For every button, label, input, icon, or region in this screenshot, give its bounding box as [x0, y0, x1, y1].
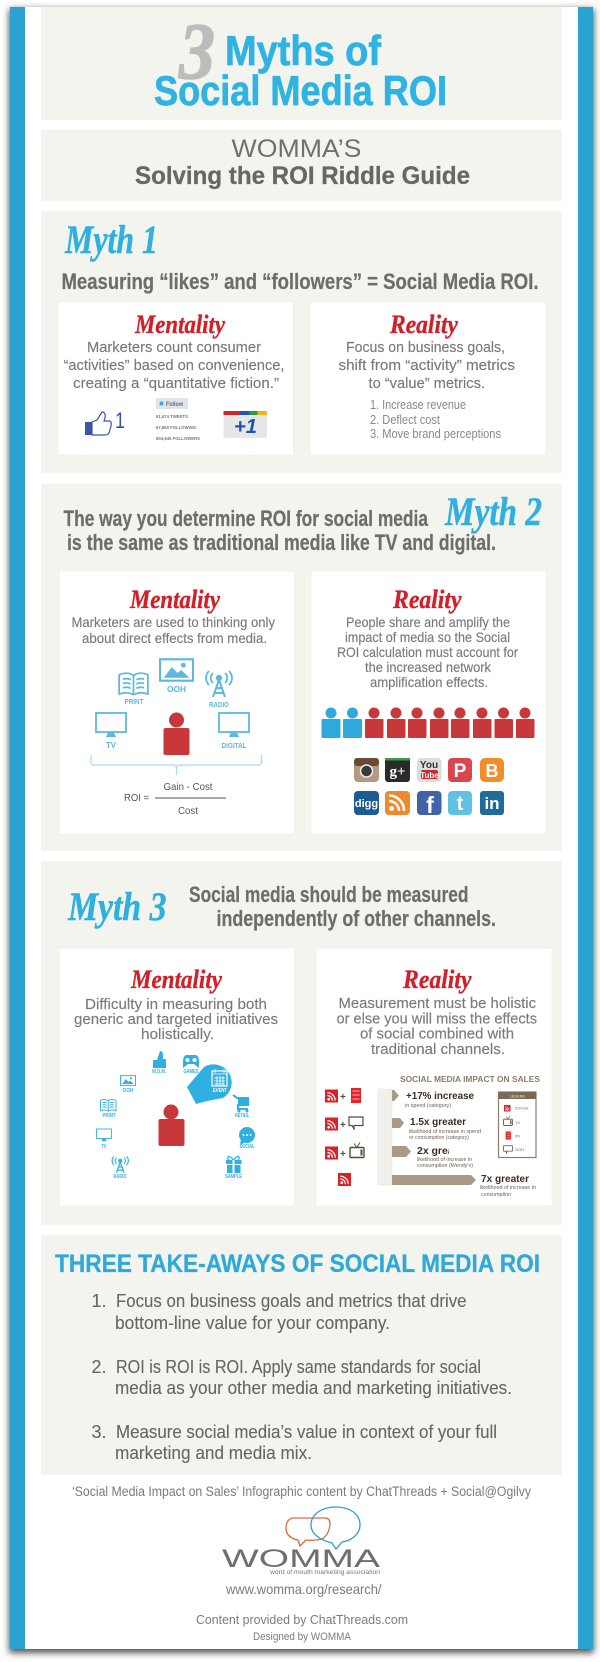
chart: social media impact on sales — [325, 1075, 541, 1198]
mentality text: Difficulty in measuring both — [85, 996, 267, 1013]
myth 2 statement — [64, 506, 496, 555]
icon: ooh — [160, 659, 193, 694]
legend: PR — [515, 1134, 520, 1138]
mentality text: generic and targeted initiatives — [74, 1011, 278, 1028]
icon: tv — [96, 1129, 112, 1150]
reality text: ROI calculation must account for — [337, 644, 518, 660]
icon: social — [239, 1127, 255, 1150]
row 1 text: in spend (category) — [405, 1103, 451, 1109]
icon: word of mouth — [152, 1051, 167, 1075]
icon: tv: TV — [102, 1144, 107, 1150]
reality text: or else you will miss the effects — [336, 1010, 537, 1028]
myth 3 heading: Myth 3 — [67, 884, 166, 929]
card: myth 2 mentality — [59, 571, 294, 834]
social network icons: t — [457, 793, 464, 815]
myth 3 statement: Social media should be measured — [189, 882, 468, 907]
reality text: Measurement must be holistic — [338, 995, 536, 1012]
icon: event callout — [187, 1064, 232, 1104]
myth 2 statement: The way you determine ROI for social media — [64, 506, 428, 531]
reality text: amplification effects. — [370, 674, 488, 690]
take-away 2: 2. — [92, 1357, 107, 1377]
myth 1 heading: Myth 1 — [64, 217, 158, 262]
myth 2 statement: is the same as traditional media like TV and digital. — [67, 530, 496, 555]
take-away 1: Focus on business goals and metrics that drive — [116, 1291, 466, 1311]
icon: print: PRINT — [102, 1113, 116, 1119]
icon: retail — [233, 1095, 249, 1119]
reality heading: Reality — [392, 585, 462, 614]
icon: games — [183, 1055, 199, 1075]
row icons: + — [340, 1092, 346, 1103]
title line 1: Myths of — [225, 27, 382, 74]
mentality heading: Mentality — [134, 310, 225, 339]
arrow bars — [392, 1090, 476, 1185]
social network icons: digg — [355, 798, 378, 810]
card: myth 1 reality — [310, 302, 546, 455]
icon: print — [101, 1099, 116, 1119]
chart title: SOCIAL MEDIA IMPACT ON SALES — [400, 1075, 541, 1084]
icon: ooh — [120, 1076, 136, 1094]
row 2 text: or consumption (category) — [409, 1135, 469, 1141]
icon: facebook like: 1 — [115, 408, 125, 433]
social network icons: f — [426, 792, 434, 818]
social network icons — [354, 758, 504, 818]
icon: radio: RADIO — [209, 702, 229, 709]
reality list: 1. Increase revenue — [370, 398, 466, 412]
row 1 text: +17% increase — [406, 1091, 474, 1102]
reality text: People share and amplify the — [346, 614, 510, 630]
legend: OOH — [515, 1147, 524, 1152]
mentality heading: Mentality — [129, 585, 220, 614]
row 4 text: likelihood of increase in — [480, 1185, 536, 1191]
row icons — [325, 1088, 364, 1186]
reality text: to “value” metrics. — [368, 375, 485, 392]
designer credit: Designed by WOMMA — [253, 1631, 352, 1643]
reality text: Focus on business goals, — [346, 339, 505, 356]
row 3 text: likelihood of increase in — [417, 1157, 472, 1163]
icon: ooh: OOH — [122, 1088, 134, 1094]
mentality heading: Mentality — [130, 965, 222, 994]
icon: radio — [112, 1156, 128, 1180]
twitter follow widget — [156, 398, 200, 441]
ROI formula: Cost — [178, 805, 198, 817]
take-away 1 — [92, 1291, 466, 1333]
numeral 3: 3 — [178, 8, 215, 96]
twitter follow widget: 603,645 FOLLOWERS — [156, 436, 200, 441]
ROI formula — [124, 781, 226, 817]
mentality text — [74, 996, 278, 1043]
reality text: of social combined with — [360, 1026, 514, 1042]
title line 2: Social Media ROI — [154, 67, 447, 114]
left blue border — [10, 7, 25, 1649]
reality text — [337, 614, 518, 690]
mentality text: Marketers count consumer — [87, 339, 261, 356]
mentality text: “activities” based on convenience, — [64, 357, 284, 374]
WOMMA'S: WOMMA’S — [232, 135, 362, 163]
reality list — [370, 398, 501, 441]
guide name: Solving the ROI Riddle Guide — [135, 162, 470, 190]
ROI formula: Gain - Cost — [164, 781, 213, 793]
icon: google plus one: +1 — [234, 416, 257, 438]
icon: radio: RADIO — [114, 1174, 127, 1180]
panel: myth 1 — [41, 211, 562, 473]
social network icons: g+ — [389, 764, 406, 780]
WOMMA wordmark: WOMMA — [222, 1545, 380, 1573]
icon: social: SOCIAL — [240, 1144, 254, 1150]
content credit: Content provided by ChatThreads.com — [196, 1612, 408, 1627]
take-away 3 — [92, 1422, 497, 1463]
legend: TV — [515, 1120, 520, 1125]
reality text: impact of media so the Social — [345, 629, 510, 645]
row 2 text: likelihood of increase in spend — [409, 1129, 481, 1135]
icon: print — [119, 673, 148, 706]
take-away 3: 3. — [92, 1422, 107, 1442]
legend: SOCIAL — [515, 1106, 530, 1110]
ROI formula: ROI = — [124, 792, 149, 804]
mentality text — [72, 614, 275, 646]
right blue border — [578, 7, 593, 1649]
WOMMA logo — [222, 1507, 380, 1576]
row icons: + — [340, 1149, 346, 1160]
row 4 text — [480, 1174, 536, 1198]
take-aways heading: THREE TAKE-AWAYS OF SOCIAL MEDIA ROI — [55, 1250, 540, 1278]
row 3 text — [417, 1145, 473, 1169]
icon: print: PRINT — [124, 699, 144, 706]
row 2 text — [409, 1117, 481, 1141]
panel: title — [41, 7, 562, 120]
take-away 2: media as your other media and marketing initiatives. — [115, 1378, 512, 1398]
icon: ooh: OOH — [167, 685, 186, 694]
network people row — [322, 708, 534, 738]
take-away 2: ROI is ROI is ROI. Apply same standards for social — [116, 1357, 481, 1377]
mentality text — [64, 339, 284, 392]
mentality text: about direct effects from media. — [82, 630, 267, 646]
icon: digital: DIGITAL — [222, 743, 247, 750]
legend — [498, 1092, 536, 1158]
panel: myth 3 — [41, 861, 562, 1225]
mentality text: Marketers are used to thinking only — [72, 614, 275, 630]
myth 3 statement — [189, 882, 496, 931]
bar axis — [378, 1089, 392, 1185]
reality text: the increased network — [365, 659, 492, 675]
icon: tv — [96, 713, 126, 750]
icon: google plus one — [224, 411, 267, 438]
legend: LEGEND — [510, 1094, 525, 1098]
myth 3 statement: independently of other channels. — [216, 906, 496, 931]
row 4 text: consumption — [481, 1192, 511, 1198]
take-away 2 — [92, 1357, 512, 1398]
myth 2 heading: Myth 2 — [444, 489, 542, 534]
row icons: + — [340, 1120, 346, 1131]
take-away 1: bottom-line value for your company. — [115, 1313, 390, 1333]
social network icons: Tube — [420, 771, 439, 780]
card: myth 3 reality — [316, 948, 552, 1206]
icon: digital — [219, 713, 249, 750]
social network icons: in — [484, 794, 500, 813]
reality text: shift from “activity” metrics — [338, 357, 515, 374]
person — [158, 1104, 184, 1146]
row 3 text: 2x greater — [417, 1146, 467, 1157]
icon: event callout: EVENT — [213, 1088, 227, 1094]
reality text — [336, 995, 537, 1058]
reality list: 2. Deflect cost — [370, 413, 440, 427]
panel: take-aways — [41, 1235, 562, 1475]
icon: tv: TV — [106, 741, 117, 750]
row 2 text: 1.5x greater — [410, 1117, 466, 1128]
social network icons: P — [454, 761, 467, 782]
panel: subtitle — [41, 130, 562, 201]
footer credit line: ‘Social Media Impact on Sales’ Infographic content by ChatThreads + Social@Ogilvy — [72, 1484, 531, 1499]
icon: radio — [206, 671, 232, 709]
row 4 text: 7x greater — [481, 1174, 529, 1185]
mentality text: holistically. — [141, 1026, 214, 1043]
reality heading: Reality — [402, 965, 472, 994]
bracket — [91, 755, 262, 775]
reality heading: Reality — [389, 310, 458, 339]
icon: speech bubbles — [286, 1507, 360, 1549]
card: myth 1 mentality — [58, 302, 294, 455]
card: myth 2 reality — [311, 571, 546, 834]
icon: word of mouth: W.O.M. — [152, 1069, 167, 1075]
take-away 3: Measure social media’s value in context of your full — [116, 1422, 497, 1442]
icon: sample: SAMPLE — [225, 1174, 243, 1180]
icon: facebook like — [85, 408, 125, 435]
reality text — [338, 339, 515, 392]
icon: retail: RETAIL — [235, 1113, 249, 1119]
panel: myth 2 — [41, 484, 562, 851]
icon: sample — [225, 1157, 243, 1180]
social network icons: You — [420, 760, 438, 771]
take-away 1: 1. — [92, 1291, 107, 1311]
icon: games: GAMES — [184, 1069, 199, 1075]
reality text: traditional channels. — [371, 1041, 505, 1058]
person — [164, 712, 190, 755]
row 1 text — [405, 1091, 474, 1109]
row 3 text: consumption (Wendy’s) — [417, 1163, 473, 1169]
mentality text: creating a “quantitative fiction.” — [73, 375, 279, 392]
twitter follow widget: Follow — [166, 402, 183, 408]
social network icons: B — [486, 761, 498, 781]
twitter follow widget: 61,674 TWEETS — [156, 414, 188, 419]
take-away 3: marketing and media mix. — [115, 1443, 312, 1463]
website url: www.womma.org/research/ — [225, 1581, 382, 1597]
tagline: word of mouth marketing association — [269, 1570, 380, 1576]
card: myth 3 mentality — [59, 948, 294, 1206]
reality list: 3. Move brand perceptions — [370, 427, 501, 441]
twitter follow widget: 67,860 FOLLOWING — [156, 425, 196, 430]
